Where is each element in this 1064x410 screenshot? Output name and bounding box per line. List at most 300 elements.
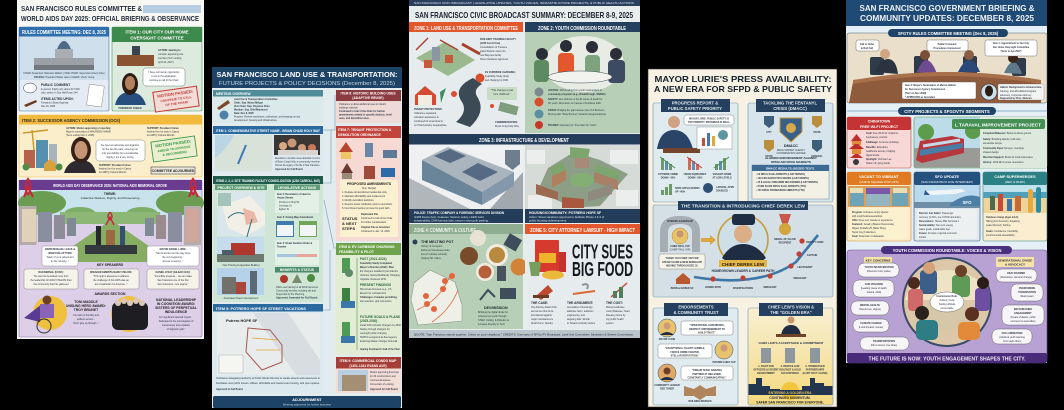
award: unsung hero: "Don't give up through..." xyxy=(73,322,99,325)
panel: zone 1: Street Vacations approved. xyxy=(480,58,509,61)
panel: progress report: PUBLIC SAFETY PRIORITY xyxy=(668,106,722,111)
heading: city projects xyxy=(847,107,1047,115)
map: site xyxy=(217,191,265,240)
callouts: key speakers: the challenge of this AIDS was an xyxy=(93,279,129,282)
endorsement: community leader xyxy=(654,364,733,390)
panel: Chief Lew's vision and golden era: CHIEF LEW'S VISION & xyxy=(768,304,814,310)
title: SAN FRANCISCO RULES COMMITTEE & xyxy=(21,6,142,13)
panel: L Taraval improvement xyxy=(914,117,1047,168)
illustration: storefronts xyxy=(848,186,910,207)
caption: police facility: sustainability, DNA/forensic labs, secure motorcycle parking. xyxy=(414,218,489,222)
panel: item 5 potrero hope SF: Ordinance delegating authority to Public Works Director to vacate streets and easements to xyxy=(216,377,321,380)
box: DMACC results: • 60 DRUG SALE ARRESTS (LAST MONTH) xyxy=(756,173,805,176)
callouts: key speakers: by the minority..." xyxy=(51,260,69,263)
icons: ev chargers xyxy=(341,258,355,343)
box: DMACC results: • 120 LBS NARCOTICS SEIZED (LAST MONTH) xyxy=(756,177,809,180)
path: career timeline: DEPUTY CHIEF xyxy=(806,241,824,244)
illustration: kids on beach xyxy=(984,185,1046,213)
panel: zone 1: Bryan Craig Kelly Way xyxy=(495,125,520,128)
arrow xyxy=(701,235,716,245)
panel: tackling the fentanyl crisis: STATE xyxy=(813,131,821,134)
charts: crime stats xyxy=(658,157,734,195)
endorsement: community leader: CONSTANTLY COMMUNICATING." xyxy=(687,376,727,380)
panel: SFO update: waste goals, sustainable fuel. xyxy=(919,228,951,231)
poster: government briefing and community updates xyxy=(846,0,1047,363)
list: youth issues xyxy=(534,88,606,129)
panel: the transition, Chief Derek Lew xyxy=(653,201,833,297)
panel: item 1 oversight committee: consider appointing one xyxy=(158,53,184,56)
panel: item 7 tenant protection: DEMOLITION ORDINANCE xyxy=(338,133,381,137)
legislative items: Vacate Streets xyxy=(277,196,294,200)
panel: item 1 oversight committee: to vet in the application, xyxy=(151,75,177,78)
title: COMMUNITY UPDATES: DECEMBER 8, 2025 xyxy=(860,14,1035,23)
panel: item 2 successor agency commission: dignity, I am a very strong xyxy=(106,156,134,159)
icons: tenant flow xyxy=(339,142,397,179)
panel: items 2 3 4 site training facility xyxy=(213,176,323,302)
panel: Chinatown wi-fi: Goal: Free Wi-Fi for residents, xyxy=(866,132,899,135)
panel: item 8 EV curbside charging: Deploy through chargers for xyxy=(360,328,390,331)
caption: potrero hope: Action: Street vacations approved to facilitate Phase 2 & 3 of xyxy=(529,215,604,219)
panel: vacant to vibrant: Featured: Jewelry (Maison Desmonde), xyxy=(852,223,895,226)
endorsement: Interim Chief Yap xyxy=(658,341,736,364)
panel: zone 5: City Attorney David Chiu xyxy=(531,306,558,309)
panel: rules committee meeting xyxy=(19,27,109,111)
panel: meeting overview: Member: Sup. Bilal Mahmood xyxy=(234,108,268,112)
box: proposed amendments: Original File as Amended xyxy=(361,226,390,229)
callout: public safety xyxy=(684,115,734,125)
scene: isometric city xyxy=(415,38,519,127)
panel: progress report xyxy=(653,99,738,202)
box: proposed amendments: 4. Require tenant notification prior to demolition. xyxy=(342,203,393,206)
arch: interim leadership: (CHIEF PAUL YAP) xyxy=(670,248,691,252)
pillars: 3. STRENGTHEN xyxy=(805,365,825,368)
pillars: OFFICERS & URGENT xyxy=(753,368,779,372)
callout: quote: from childhood." xyxy=(493,93,511,96)
callouts: key speakers: Zero infections, zero stigma." xyxy=(158,283,189,286)
award: Sisters of Perpetual Indulgence: INDULGENCE xyxy=(165,310,188,314)
photo xyxy=(274,135,320,155)
panel: item 6 historic building uses: buildings citywide. xyxy=(339,106,359,110)
title xyxy=(846,0,1047,26)
panel: zone 1: COMMEMORATION: xyxy=(495,121,518,124)
heading pill xyxy=(888,29,1008,37)
box: proposed amendments: Duplicated File xyxy=(361,213,379,216)
path: career timeline: INVESTIGATIONS xyxy=(733,287,753,290)
stamp: motion passed: CONTINUE TO CALL xyxy=(160,95,192,103)
callouts: generational divide: ENCOURAGING xyxy=(1014,308,1032,311)
endorsement: Interim Chief Yap: STELLAR REPUTATION." xyxy=(671,354,699,358)
panel: meeting overview: Land Use & Transportation Committee xyxy=(234,98,278,101)
panel: zone 5: system. xyxy=(606,322,615,325)
banner: footer message: THE FUTURE IS NOW: YOUTH ENGAGEMENT SHAPES THE CITY. xyxy=(868,356,1026,362)
callouts: key speakers: DAN BERNAL (UCSF): xyxy=(38,271,64,274)
stamp: motion passed: OF THE CHAIR xyxy=(165,100,189,107)
panel: item 1 oversight committee xyxy=(112,27,202,112)
panel: item 9 commercial condo map: (1301-1341 EVANS AVE) xyxy=(349,364,387,368)
box: DMACC results: • OVER 60,000 DRUG SALE ARRESTS (YTD) xyxy=(756,185,806,188)
pillars: VIOLENCE & HOLD xyxy=(779,368,801,372)
panel: vacant to vibrant: VACANT TO VIBRANT xyxy=(859,175,900,179)
panel: vacant to vibrant: with small businesses/artists. xyxy=(852,215,883,218)
panel: zone 5: costs (Diabetes, Heart xyxy=(606,310,630,313)
panel: tackling the fentanyl crisis: ALIGNED ENFORCEMENT AGAINST xyxy=(765,156,817,160)
panel: meeting overview: Purpose: Review resolutions, ordinances, and hearings on city xyxy=(234,116,301,118)
panel: item 1 commemorative street name: Approved for Full Board. xyxy=(275,168,303,171)
panel: zone 4: STEM, Coding, & Robotics to xyxy=(478,319,510,322)
box: proposed amendments: Continued to Jan. 12, 2026 xyxy=(361,230,390,233)
panel: item 1 oversight committee: member (Term ending xyxy=(158,57,182,60)
panel: zone 4: kitchens (Vietnamese delis, xyxy=(421,249,450,252)
panel: item 8 EV curbside charging: Upgrade. Reduced GHG xyxy=(360,278,386,281)
poster: land use and transportation xyxy=(212,67,402,408)
callouts: generational divide: from each other) xyxy=(1003,340,1021,343)
pillars: ACCOUNTABLE xyxy=(781,372,800,375)
list: youth issues: TRANSIT: Advocacy for "Free Muni for Youth". xyxy=(548,124,597,127)
award: Sisters of Perpetual Indulgence: For significant national impact... xyxy=(159,316,193,319)
title xyxy=(654,75,833,94)
panel: item 6 historic building uses xyxy=(336,90,401,123)
callouts: generational divide xyxy=(992,269,1044,344)
panel: SFO update xyxy=(914,172,980,241)
callouts: key speakers: DANIEL O'DAY (GILEAD CEO): xyxy=(156,271,191,274)
award: unsung hero xyxy=(24,296,106,333)
panel: zone 4: ZONE 4: COMMUNITY & CULTURE xyxy=(414,228,476,234)
panel: L Taraval improvement: accessible ramps. xyxy=(983,142,1002,145)
illustration: roundtable circle: holding officials xyxy=(939,303,956,306)
skyline: sunrise xyxy=(748,378,832,400)
panel: zone 1: Consolidation of Treasure xyxy=(480,46,508,49)
panel: zone 1 xyxy=(409,22,523,133)
stamp: motion passed amended: & RECOMMEND xyxy=(162,150,188,157)
panel: camp superheroes: Goals: Confidence, friendship, xyxy=(986,230,1019,233)
render: tower complex xyxy=(217,268,264,295)
award: unsung hero: TONI MADDLE xyxy=(74,300,98,304)
panel: vacant to vibrant: Taylor Jay (Collective). xyxy=(852,231,876,234)
caption: potrero hope: HOUSING/COMMUNITY: POTRERO HOPE SF xyxy=(529,211,601,215)
box: proposed amendments: Continued to Call of the Chair xyxy=(361,217,393,220)
endorsement: Mayor Lurie: MAYOR LURIE xyxy=(659,338,676,341)
stamp: motion passed xyxy=(153,86,199,112)
callouts: key speakers: the very beginning... xyxy=(162,256,184,259)
panel: item 9 commercial condo map xyxy=(336,357,401,393)
endorsement: Interim Chief Yap: INTERIM CHIEF YAP xyxy=(713,361,736,364)
panel: items 2 3 4 site training facility: Associated Towers Development xyxy=(224,297,259,300)
banner: golden era: SAFER SAN FRANCISCO FOR EVERYONE. xyxy=(756,400,824,404)
footer: adjournment xyxy=(213,396,401,408)
callouts: generational divide: OKAY BOOMER xyxy=(1007,272,1025,275)
panel: item 5 potrero hope SF: ITEM 5: POTRERO HOPE SF STREET VACATIONS xyxy=(216,307,306,311)
charts: crime stats: CITYWIDE CRIME xyxy=(658,173,678,176)
icons: gavel, cigarette, chart xyxy=(533,283,627,300)
panel: zone 5 xyxy=(525,224,640,329)
map xyxy=(215,135,272,171)
list: youth issues: community programs (e.g., Breakthrough, SNARF). xyxy=(548,93,606,96)
panel: item 8 EV curbside charging: FEASIBILITY & PILOT xyxy=(339,250,375,254)
panel: youth commission roundtable: & ADVOCACY xyxy=(1005,262,1025,266)
panel: SFO update: Renovations: Harvey Milk Terminal 1. xyxy=(919,220,960,223)
panel: Chinatown wi-fi: businesses, tourists. xyxy=(866,136,888,139)
panel: tackling the fentanyl crisis: OPEN-AIR DRUG MARKETS xyxy=(771,160,811,164)
panel: zone 5: Disease) borne by xyxy=(606,314,626,317)
callout: thank you xyxy=(659,254,705,269)
panel: item 8 EV curbside charging: PAST (2021-2024) xyxy=(360,257,387,261)
endorsement: Mayor Lurie: RESPECT, EMPOWERMENT TO xyxy=(689,328,725,331)
portrait: Chief Derek Lew xyxy=(718,214,768,267)
panel: item 8 EV curbside charging: Exploring Master Charger Potential xyxy=(360,340,398,343)
portrait: Hakimi: housing, and affordable/immigrant xyxy=(1000,90,1036,93)
panel: tackling the fentanyl crisis: COORDINATION CENTER xyxy=(777,152,806,155)
callouts: key concerns: MENTAL HEALTH xyxy=(860,304,880,307)
panel: zone 1: FIRE DEPT TRAINING FACILITY xyxy=(480,38,516,41)
panel: rules committee meeting: ITEMS ACTED UPON: xyxy=(41,97,74,101)
callouts: key concerns: TRANSPORTATION xyxy=(873,340,895,343)
callouts: key speakers: IMAM PHILLIP TODD xyxy=(48,252,72,255)
box: DMACC results: • 704 DRUG POSSESSION ARRESTS (YTD) xyxy=(756,189,805,192)
panel: item 7 tenant protection xyxy=(336,126,401,241)
callouts: meeting events: Procedures Announced xyxy=(934,47,961,50)
panel: item 2 successor agency commission: for the last 30 years, ensuring not xyxy=(102,148,138,151)
panel: the transition, Chief Derek Lew: THE TRANSITION & INTRODUCING CHIEF DEREK LEW xyxy=(681,204,806,208)
banner: golden era: CONTINUED MOMENTUM. xyxy=(769,396,811,400)
panel: endorsements and community trust: BUILDING BRIDGES xyxy=(688,400,712,403)
panel: L Taraval improvement: Complete Makeover: Below & above ground. xyxy=(983,132,1032,135)
panel: camp superheroes: Hiking (Fort Funston), Kayaking xyxy=(986,220,1020,223)
panel: vacant to vibrant xyxy=(847,172,911,241)
portrait: Hakimi: advocacy, Corporate Attorney. xyxy=(1000,94,1032,97)
portrait: Hakimi: Hakimi: Background in infrastructure, xyxy=(1000,86,1042,89)
charts: crime stats: VIOLENT CRIME xyxy=(713,173,732,176)
icon: medal of valor: RECIPIENT xyxy=(779,242,792,244)
panel: item 8 EV curbside charging: Challenges: Complex permitting, xyxy=(360,296,398,299)
panel: Chinatown wi-fi: CHINATOWN xyxy=(868,120,891,124)
box: DMACC results: DMACC RESULTS (SEIZED TEXT) xyxy=(766,166,814,170)
panel: progress report: PROGRESS REPORT & xyxy=(672,100,718,106)
panel: zone 5: to Tobacco industry tactics. xyxy=(567,322,596,325)
callouts: meeting events: & Roll Call xyxy=(861,47,873,50)
poster: rules committee and World AIDS Day xyxy=(17,0,204,339)
callouts: meeting events: for Successor Agency Commission xyxy=(905,88,946,91)
panel: zone 2: ZONE 2: YOUTH COMMISSION ROUNDTABLE xyxy=(538,26,626,32)
callouts: generational divide: COLLABORATION xyxy=(1002,332,1023,335)
box: proposed amendments: 3. Modify demolition definition. xyxy=(342,199,374,202)
panel: meeting overview: Vice Chair: Sup. Chyanne Chen xyxy=(234,105,270,108)
box: DMACC results: • 25 ILLEGAL FIREARMS RECOVERED (LAST MONTH) xyxy=(756,181,818,184)
banner: footer message xyxy=(847,353,1047,363)
callouts: generational divide: comment is accessible) xyxy=(1011,320,1036,323)
scene: memorial grove xyxy=(18,190,204,262)
panel: camp superheroes: environmental stewardship. xyxy=(986,234,1015,237)
panel: the transition, Chief Derek Lew: MOVING THROUGH DEC 31 xyxy=(666,264,698,268)
panel: vacant to vibrant: Program: Activates empty spaces xyxy=(852,211,889,214)
panel: rules committee meeting xyxy=(847,29,1047,103)
panel: youth commission roundtable: KEY CONCERNS xyxy=(866,258,890,262)
panel: zone 1: and charging by 2030. xyxy=(485,79,509,82)
callouts: key speakers: "Incredible progress... we can make xyxy=(154,275,193,278)
panel: rules committee meeting: RULES COMMITTEE MEETING: DEC 8, 2025 xyxy=(22,30,106,36)
panel: zone 5: ZONE 5: CITY ATTORNEY LAWSUIT - HIGH IMPACT xyxy=(530,228,636,234)
panel: items 2 3 4 site training facility: PROJECT OVERVIEW & SITE xyxy=(217,186,265,190)
panel: zone 1: Continued for amendments xyxy=(414,120,444,123)
endorsement: Mayor Lurie: "OPERATIONAL EXPERIENCE, xyxy=(689,324,725,327)
panel: zone 1: EV CURBSIDE CHARGING: xyxy=(485,71,516,74)
callouts: key speakers: SPEAKER EMERITA NANCY PELOSI: xyxy=(90,271,132,274)
arrows: connectors xyxy=(323,95,336,310)
panel: L Taraval improvement: Community Input: Surveys, meetings xyxy=(983,147,1025,150)
panel: item 8 EV curbside charging: overnight public charging xyxy=(360,332,387,335)
award: Sisters of Perpetual Indulgence: IN COGNITION AWARD: xyxy=(157,302,195,306)
scene: tram xyxy=(914,118,982,168)
panel: zone 5: THE ARGUMENT: xyxy=(567,301,593,305)
illustration: airplane and terminal: SFO xyxy=(962,200,972,205)
callouts: key speakers: MAYOR DANIEL LURIE: xyxy=(160,248,187,251)
panel: camp superheroes xyxy=(983,172,1047,241)
footer: adjournment: ADJOURNMENT xyxy=(292,398,322,402)
list: youth issues: Moving past "Okay Boomer" towards intergenerational. xyxy=(548,113,606,116)
benefits and status: Community benefits including rail and xyxy=(276,290,316,292)
panel: zone 4: French culinary schools) xyxy=(421,253,447,256)
panel: rules committee meeting: MEMBER: President Mahar Lawn | CLERK: Victor Young xyxy=(34,76,95,79)
panel: item 2 successor agency commission: SUPPORT: President Cohen xyxy=(99,164,131,167)
panel: SFO update: SFO UPDATE xyxy=(935,175,960,179)
callouts: key concerns: trauma, drills) xyxy=(867,291,881,294)
award: unsung hero: TROY BRUNET xyxy=(74,308,99,312)
callout: quote xyxy=(143,68,185,86)
title: SAN FRANCISCO LAND USE & TRANSPORTATION: xyxy=(216,70,398,79)
caption: police facility xyxy=(409,209,523,223)
panel: item 8 EV curbside charging xyxy=(336,243,401,355)
path: career timeline: CAPTAIN xyxy=(807,254,817,257)
icon: city hall xyxy=(34,41,94,70)
title: WORLD AIDS DAY 2025: OFFICIAL BRIEFING & OBSERVANCE xyxy=(21,16,199,23)
callouts: generational divide: (Resistance, demand change) xyxy=(1000,276,1032,279)
panel: zone 4: History of immigrant xyxy=(421,245,443,248)
portrait: Chief Derek Lew: CHIEF DEREK LEW xyxy=(722,262,765,267)
labels: sections xyxy=(864,257,892,263)
callouts: key speakers xyxy=(24,246,199,289)
panel: meeting overview: Chair: Sup. Myrna Melgar xyxy=(234,102,263,104)
panel: tackling the fentanyl crisis: FEDERAL xyxy=(811,155,823,158)
box: proposed amendments: 2. Maintain affordability and replacement xyxy=(342,195,385,198)
panel: Chief Lew's vision and golden era xyxy=(748,303,833,405)
panel: zone 5: kind lawsuit against xyxy=(531,314,552,317)
callouts: key concerns: GUN VIOLENCE xyxy=(865,283,884,286)
panel: potrero hope housing xyxy=(525,145,640,209)
callouts: key concerns: (Leading cause of death, xyxy=(861,287,887,290)
caption: potrero hope xyxy=(525,209,640,223)
panel: SFO update: Director Ivar Satter: Passenger xyxy=(919,212,954,215)
panel: item 8 EV curbside charging: Install 100 Curbside Chargers by 2030 xyxy=(360,324,401,327)
icon: pagoda xyxy=(849,134,864,165)
panel: police facility xyxy=(409,145,523,209)
panel: rules committee meeting: CHAIR: Supervisor Shamann Walton | VICE CHAIR: Supervisor Cheryl Chen xyxy=(23,72,105,75)
callouts: meeting events: * APPROVED as Amended xyxy=(905,96,935,99)
panel: zone 5: BIG FOOD xyxy=(572,258,633,281)
path: career timeline: BORN & RAISED SF xyxy=(671,287,694,290)
panel: World AIDS Day observance: WORLD AIDS DAY OBSERVANCE 2025: NATIONAL AIDS MEMORIAL GROVE xyxy=(53,183,168,189)
icon: handshake xyxy=(684,385,716,400)
panel: item 6 historic building uses: ITEM 6: HISTORIC BUILDING USES xyxy=(340,92,396,96)
pillars: RECRUITMENT xyxy=(757,372,775,375)
banner: golden era xyxy=(748,390,832,404)
panel: L Taraval improvement: Merchant Support: Boost for local businesses. xyxy=(983,156,1034,159)
panel: youth commission roundtable xyxy=(847,246,1047,363)
stamp: motion passed amended xyxy=(151,136,197,162)
poster: Mayor Lurie press availability xyxy=(648,69,837,407)
list: youth issues: SF youth. Discussion on trauma of lockdown drills. xyxy=(548,102,602,105)
pillars: 1. FIGHT FOR xyxy=(758,365,774,368)
panel: zone 5: city public health xyxy=(606,318,624,321)
charts: crime stats: LATERAL APPS xyxy=(716,186,734,189)
callouts: key speakers: the community that has gathered xyxy=(34,283,69,286)
portrait: Hakimi xyxy=(981,84,1044,100)
endorsement: community leader: RED TONER xyxy=(660,388,674,390)
callouts: meeting events: (Term to Nov 2028) xyxy=(905,92,927,95)
title: FUTURE PROJECTS & POLICY DECISIONS (December 8, 2025) xyxy=(219,81,395,87)
award: unsung hero: UNSUNG HERO AWARD: xyxy=(66,304,106,308)
panel: item 1 oversight committee: April 22, 2027) xyxy=(158,61,174,64)
panel: item 6 historic building uses: Ordinance to allow additional uses in historic xyxy=(339,103,387,106)
panel: Chinatown wi-fi xyxy=(847,117,911,168)
arch: interim leadership: CHIEF PAUL YAP xyxy=(670,245,690,248)
panel: Chinatown wi-fi: FREE WI-FI PROJECT xyxy=(860,125,899,129)
icon: medal of valor: MEDAL OF VALOR xyxy=(774,238,796,241)
caption: police facility: (1995 Evans Ave). Features: Seismic safety, LEED Gold xyxy=(414,215,484,219)
icon: construction scene xyxy=(22,130,62,171)
award: unsung hero: For spirit of humility and xyxy=(73,314,99,317)
callout: quote: "This changes a year xyxy=(491,89,513,92)
panel: item 8 EV curbside charging: FUTURE GOALS & PLANS xyxy=(360,315,400,319)
callout: quote xyxy=(487,87,517,100)
legislative items: Item 2: Resolution of intent to xyxy=(277,193,311,196)
icons: badges xyxy=(764,116,822,152)
panel: item 2 successor agency commission: SUPPORT: President Cohen xyxy=(147,127,179,130)
panel: zone 5: THE CASE: xyxy=(531,301,548,305)
legislative items: Portions of Virgil St xyxy=(279,201,300,204)
box: proposed amendments: STEPS xyxy=(342,226,355,231)
benefits and status: Approved, Amended for Full Board. xyxy=(276,296,318,300)
footer: quote and credit: QUOTE: "San Francisco stands together. Check on your neighbors." CREDITS: Summary of SFGovTV Broadcast: Land Use Committee; Sanitation & Streets Commission. xyxy=(414,332,634,336)
portrait: President Cohen xyxy=(115,73,146,105)
endorsement: community leader: COMMUNITY LEADER xyxy=(654,384,680,387)
charts: crime stats: UP ~60% xyxy=(675,190,686,194)
box: proposed amendments xyxy=(340,180,398,237)
panel: SFO update: Sustainability: Net zero energy xyxy=(919,224,954,227)
footer: quote and credit xyxy=(409,330,640,338)
panel: Chief Lew's vision and golden era: THE "GOLDEN ERA" xyxy=(770,310,812,315)
callouts: key concerns: CLIMATE CHANGE xyxy=(860,322,882,325)
panel: item 7 tenant protection: ITEM 7: TENANT PROTECTION & xyxy=(338,128,392,132)
scene: roundtable xyxy=(534,36,625,92)
legislative items xyxy=(275,191,319,265)
panel: camp superheroes: Outdoors Camp (Ages 9-12): xyxy=(986,216,1019,219)
benefits and status: BENEFITS & STATUS xyxy=(280,268,315,272)
panel: zone 1: (1236 Carroll Ave) xyxy=(480,42,500,45)
heading: awards section: AWARDS SECTION xyxy=(95,292,126,296)
panel: Chinatown wi-fi: Station (P. going back). xyxy=(866,162,891,165)
panel: items 2 3 4 site training facility: ITEMS 2, 3, 4: SITE TRAINING FACILITY CONSOLIDATION (1236 CARROLL AVE) xyxy=(216,179,320,183)
panel: item 8 EV curbside charging: Hearing Continued to Call of the Chair xyxy=(360,348,400,351)
list: youth issues: SAFETY: Gun violence is the #1 cause of death for xyxy=(548,98,602,101)
callouts: meeting events: Our Home Oversight Committee xyxy=(993,46,1030,49)
panel: zone 5: announces first-of-its- xyxy=(531,310,554,313)
panel: World AIDS Day observance: Collective Wisdom, Dignity, and Persevering xyxy=(81,196,140,200)
callouts: key speakers: "This quilt is awesome to address xyxy=(93,275,130,278)
panel: Chief Lew's vision and golden era: CHIEF LEW'S ACCEPTANCE & COMMITMENT xyxy=(758,341,824,345)
panel: zone 5: Rising healthcare xyxy=(606,306,625,309)
panel: item 1 commemorative street name: of Brian Craig Kelly, a community member xyxy=(275,160,320,164)
illustration: roundtable circle: Commission Role: xyxy=(936,295,958,298)
panel: vacant to vibrant: Miguel (Collabo 25, Baller Play), xyxy=(852,227,886,230)
